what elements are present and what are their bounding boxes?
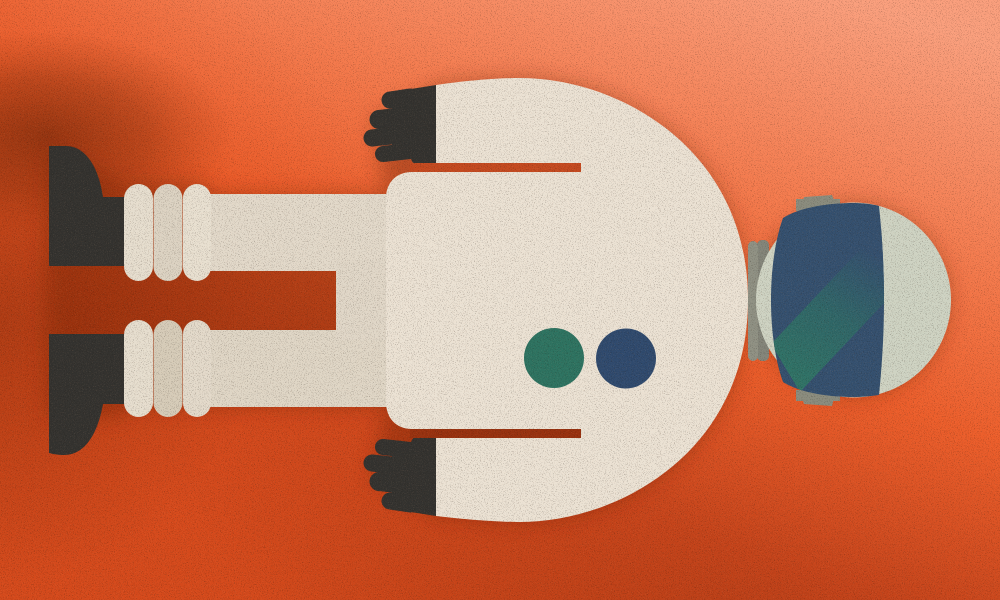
figure cast shadow xyxy=(45,78,950,522)
helmet bottom clip xyxy=(796,390,840,406)
visor reflection xyxy=(771,222,886,392)
lower leg cuffs xyxy=(124,320,211,417)
upper arm slit xyxy=(410,163,581,172)
upper leg cuffs xyxy=(124,184,211,281)
lower arm slit xyxy=(410,429,581,438)
hips xyxy=(336,260,390,340)
astronaut xyxy=(49,78,951,522)
upper leg xyxy=(190,194,390,271)
lower leg xyxy=(190,330,390,407)
lower boot xyxy=(49,334,126,455)
torso and arms xyxy=(386,78,748,522)
visor xyxy=(771,203,884,397)
helmet top clip xyxy=(796,195,840,211)
neck ring xyxy=(748,240,769,361)
chest button: blue xyxy=(596,328,656,388)
chest button: green xyxy=(524,328,584,388)
lower glove xyxy=(372,438,436,516)
helmet xyxy=(756,202,951,398)
upper boot xyxy=(49,146,126,266)
upper glove xyxy=(372,85,436,163)
